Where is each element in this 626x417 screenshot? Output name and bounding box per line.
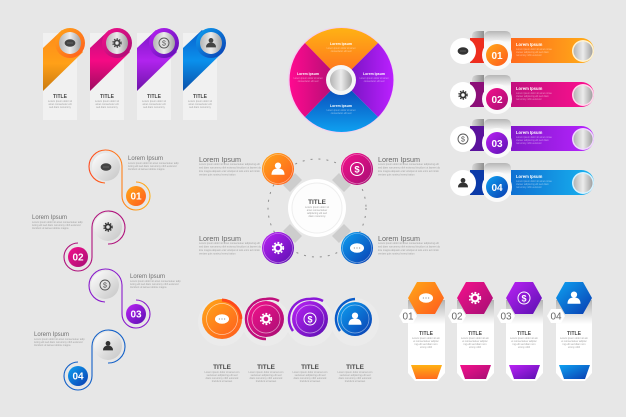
bar 01: ctetuer adipiscing elit sed diam (516, 51, 549, 54)
item 3: diam nonummy nibh euismod (294, 377, 327, 380)
hex card 04: ing elit sed diam non (563, 343, 586, 346)
card 1: TITLE (53, 94, 68, 100)
hex card 04: Lorem ipsum dolor sit am (560, 337, 588, 340)
hub text: bottom left: lore magna aliquam erat volutpat ut wisi enim ad minim (199, 249, 260, 252)
bar 04: nonummy nibh euismod (516, 186, 542, 189)
hub text: top right: veniam quis nostrud exerci tation (378, 174, 415, 176)
bar 02: 02 (491, 95, 503, 106)
item 4: TITLE (346, 364, 365, 371)
sector labels (294, 42, 389, 115)
bar 02: ctetuer adipiscing elit sed diam (516, 95, 549, 98)
card 3 (137, 28, 179, 120)
hub text: bottom left: Lorem Ipsum (199, 234, 241, 243)
hub text: bottom left (199, 234, 262, 256)
card 2: Lorem ipsum dolor sit (95, 100, 119, 103)
hex card 03: ummy nibh (518, 346, 531, 349)
hex card 03: et consectetuer adipisc (511, 340, 538, 343)
hub text: top right (378, 155, 441, 176)
step 03: tincidunt ut laoreet dolore magna (130, 286, 167, 289)
card 2: sed diam nonummy (96, 106, 119, 109)
item 3: sectetuer adipiscing elit sed (295, 374, 326, 377)
hub text: bottom right: lore magna aliquam erat volutpat ut wisi enim ad minim (378, 249, 439, 252)
item 1: tincidunt ut laoreet (212, 380, 233, 383)
step 02: Lorem Ipsum (32, 215, 67, 221)
hub text: top left: Lorem ipsum dolor sit amet consectetuer adipiscing elit (199, 163, 260, 166)
hub text: bottom right: sed diam nonummy nibh euismod tincidunt ut laoreet do (378, 246, 441, 248)
step 01: iscing elit sed diam nonummy nibh euismod (128, 165, 177, 168)
bar 01: 01 (491, 51, 503, 62)
item 1 (198, 298, 246, 383)
hex card 01: et consectetuer adipisc (413, 340, 440, 343)
item 1: diam nonummy nibh euismod (206, 377, 239, 380)
bar 02: Lorem ipsum dolor sit amet conse (516, 92, 553, 95)
item 2: diam nonummy nibh euismod (250, 377, 283, 380)
bar 03: Lorem ipsum dolor sit amet conse (516, 136, 553, 139)
hub text: top left (199, 155, 262, 176)
step 03: Lorem Ipsum (130, 274, 165, 280)
step 02: tincidunt ut laoreet dolore magna (32, 227, 69, 230)
hub text: top left: veniam quis nostrud exerci tation (199, 174, 236, 176)
card 1 (43, 28, 85, 120)
hub text: bottom left: Lorem ipsum dolor sit amet consectetuer adipiscing elit (199, 242, 260, 245)
hub text: top right: Lorem Ipsum (378, 155, 420, 164)
hex card 03: TITLE (517, 331, 532, 337)
item 3: $ (307, 314, 313, 324)
hub text: top right: lore magna aliquam erat volutpat ut wisi enim ad minim (378, 170, 439, 173)
step 04: Lorem Ipsum (34, 332, 69, 338)
hex card 03: $ (521, 294, 527, 304)
sector: left (290, 43, 341, 117)
bar 04: 04 (491, 183, 503, 194)
panel: hexagon cards (399, 282, 592, 381)
card 3: amet consectetur elit (142, 103, 166, 106)
item 3 (286, 298, 334, 383)
panel: winding timeline (32, 150, 181, 390)
hub text: bottom left: veniam quis nostrud exerci tation (199, 252, 236, 256)
sector labels: Lorem Ipsum (330, 104, 352, 108)
step 04: 04 (72, 372, 84, 382)
card 2 (90, 28, 132, 120)
item 4: diam nonummy nibh euismod (339, 377, 372, 380)
item 1: sectetuer adipiscing elit sed (207, 374, 238, 377)
pie chart (288, 27, 394, 133)
hex card 04: TITLE (567, 331, 582, 337)
step 03: $ (103, 282, 107, 290)
step 03: Lorem ipsum dolor sit amet consectetuer adip (130, 280, 181, 283)
item 3: TITLE (301, 364, 320, 371)
hex card 02: 02 (451, 312, 463, 322)
hub text: bottom right: Lorem Ipsum (378, 234, 420, 243)
item 1: Lorem ipsum dolor sit amet con (205, 371, 240, 374)
card 4: amet consectetur elit (188, 103, 212, 106)
item 2: tincidunt ut laoreet (256, 380, 277, 383)
hex card 03: ing elit sed diam non (513, 343, 536, 346)
hex card 02: Lorem ipsum dolor sit am (461, 337, 489, 340)
hex card 04: et consectetuer adipisc (561, 340, 588, 343)
pie centre (326, 65, 356, 95)
card 3: Lorem ipsum dolor sit (142, 100, 166, 103)
step 02: iscing elit sed diam nonummy nibh euismod (32, 224, 81, 227)
step 04: iscing elit sed diam nonummy nibh euismod (34, 341, 83, 344)
hub circle: amet consectetuer (307, 209, 327, 212)
hex card 01: Lorem ipsum dolor sit am (412, 337, 440, 340)
step 03: 03 (130, 310, 142, 320)
card 3: $ (162, 40, 166, 48)
node: dollar (341, 153, 373, 185)
hub text: bottom left: sed diam nonummy nibh euismod tincidunt ut laoreet do (199, 246, 262, 248)
card 3: TITLE (147, 94, 162, 100)
bar 04 (450, 163, 594, 202)
hub text: bottom right (378, 234, 441, 256)
bar 02: Lorem Ipsum (516, 86, 543, 91)
sector labels: consectetur elit sed (331, 50, 352, 53)
card 3: sed diam nonummy (143, 106, 166, 109)
hex card 03: 03 (500, 312, 512, 322)
step 01 (89, 150, 179, 210)
node: dollar: $ (354, 164, 360, 176)
hub text: top left: sed diam nonummy nibh euismod tincidunt ut laoreet do (199, 166, 262, 170)
card 4: TITLE (193, 94, 208, 100)
sector labels: consectetur elit sed (298, 80, 319, 83)
bar 03: $ (461, 136, 465, 144)
sector labels: Lorem ipsum dolor sit amet (360, 77, 389, 80)
hub circle: diam nonummy (308, 215, 326, 218)
hex card 04 (547, 282, 592, 381)
sector: bottom (305, 80, 378, 132)
hub text: top left: lore magna aliquam erat volutpat ut wisi enim ad minim (199, 170, 260, 173)
sector labels: Lorem Ipsum (363, 72, 385, 76)
hex card 02: ing elit sed diam non (464, 343, 487, 346)
step 01: 01 (130, 192, 142, 202)
panel: horizontal bars (450, 31, 594, 202)
hub text: top right: Lorem ipsum dolor sit amet consectetuer adipiscing elit (378, 163, 439, 166)
sector labels: Lorem ipsum dolor sit amet (327, 109, 356, 112)
panel: central hub diagram (199, 153, 441, 264)
sector labels: Lorem Ipsum (330, 42, 352, 46)
item 2: Lorem ipsum dolor sit amet con (249, 371, 284, 374)
bar 04: Lorem ipsum dolor sit amet conse (516, 180, 553, 183)
item 4 (331, 298, 379, 383)
card 4 (183, 28, 226, 120)
hub text: top left: Lorem Ipsum (199, 155, 241, 164)
hub text: top right: sed diam nonummy nibh euismod tincidunt ut laoreet do (378, 166, 441, 170)
item 3: Lorem ipsum dolor sit amet con (293, 371, 328, 374)
bar 02: nonummy nibh euismod (516, 98, 542, 101)
hex card 04: ummy nibh (568, 346, 581, 349)
bar 04: ctetuer adipiscing elit sed diam (516, 183, 549, 186)
sector labels: consectetur elit sed (331, 112, 352, 115)
hub circle: adipiscing elit sed (307, 212, 327, 215)
sector labels: consectetur elit sed (364, 80, 385, 83)
hex card 02 (448, 282, 494, 381)
item 2: TITLE (257, 364, 276, 371)
bar 03: 03 (491, 139, 503, 150)
card 1: amet consectetur elit (48, 103, 72, 106)
hub text: bottom right: veniam quis nostrud exerci tation (378, 252, 415, 256)
bar 03 (450, 119, 594, 158)
sector labels: Lorem ipsum dolor sit amet (327, 47, 356, 50)
hex card 03: Lorem ipsum dolor sit am (510, 337, 538, 340)
step 01: Lorem Ipsum (128, 156, 163, 162)
hub circle: TITLE (308, 199, 327, 206)
bar 01: Lorem Ipsum (516, 42, 543, 47)
bar 01 (450, 31, 594, 70)
bar 03: Lorem Ipsum (516, 130, 543, 135)
card 1: sed diam nonummy (49, 106, 72, 109)
hub circle (288, 179, 346, 237)
step 02: Lorem ipsum dolor sit amet consectetuer adip (32, 221, 83, 224)
card 4: sed diam nonummy (189, 106, 212, 109)
hex card 01 (399, 282, 445, 381)
bar 02 (450, 75, 594, 114)
card 2: TITLE (100, 94, 115, 100)
hub circle: Lorem ipsum dolor sit (305, 206, 329, 209)
bar 04: Lorem Ipsum (516, 174, 543, 179)
panel: ribbon cards (43, 28, 226, 120)
node: gear (262, 232, 294, 264)
card 1: Lorem ipsum dolor sit (48, 100, 72, 103)
bar 01: nonummy nibh euismod (516, 54, 542, 57)
bar 01: Lorem ipsum dolor sit amet conse (516, 48, 553, 51)
hex card 01: ing elit sed diam non (415, 343, 438, 346)
hex card 04: 04 (550, 312, 562, 322)
step 04: Lorem ipsum dolor sit amet consectetuer adip (34, 338, 85, 341)
step 02 (32, 211, 125, 271)
hex card 01: 01 (402, 312, 414, 322)
sector: right (341, 43, 393, 117)
bar 03: nonummy nibh euismod (516, 142, 542, 145)
bar 03: ctetuer adipiscing elit sed diam (516, 139, 549, 142)
item 2: sectetuer adipiscing elit sed (251, 374, 282, 377)
hex card 02: ummy nibh (469, 346, 482, 349)
step 02: 02 (72, 252, 84, 264)
hex card 01: ummy nibh (420, 346, 433, 349)
panel: circle row (198, 298, 379, 383)
hex card 02: TITLE (468, 331, 483, 337)
step 01: Lorem ipsum dolor sit amet consectetuer adip (128, 162, 179, 165)
hub text: bottom right: Lorem ipsum dolor sit amet consectetuer adipiscing elit (378, 242, 439, 245)
hex card 03 (497, 282, 543, 381)
card 4: Lorem ipsum dolor sit (188, 100, 212, 103)
item 3: tincidunt ut laoreet (300, 380, 321, 383)
item 2 (242, 298, 290, 383)
step 03: iscing elit sed diam nonummy nibh euismod (130, 283, 179, 286)
node: chat (341, 232, 373, 264)
sector: top (305, 28, 378, 80)
item 4: Lorem ipsum dolor sit amet con (338, 371, 373, 374)
item 4: sectetuer adipiscing elit sed (340, 374, 371, 377)
item 1: TITLE (213, 364, 232, 371)
hex card 01: TITLE (419, 331, 434, 337)
node: person (262, 153, 294, 185)
card 2: amet consectetur elit (95, 103, 119, 106)
sector labels: Lorem Ipsum (297, 72, 319, 76)
step 04: tincidunt ut laoreet dolore magna (34, 344, 71, 347)
sector labels: Lorem ipsum dolor sit amet (294, 77, 323, 80)
hex card 02: et consectetuer adipisc (462, 340, 489, 343)
step 01: tincidunt ut laoreet dolore magna (128, 168, 165, 171)
item 4: tincidunt ut laoreet (345, 380, 366, 383)
step 03 (89, 269, 181, 328)
step 04 (34, 330, 125, 390)
